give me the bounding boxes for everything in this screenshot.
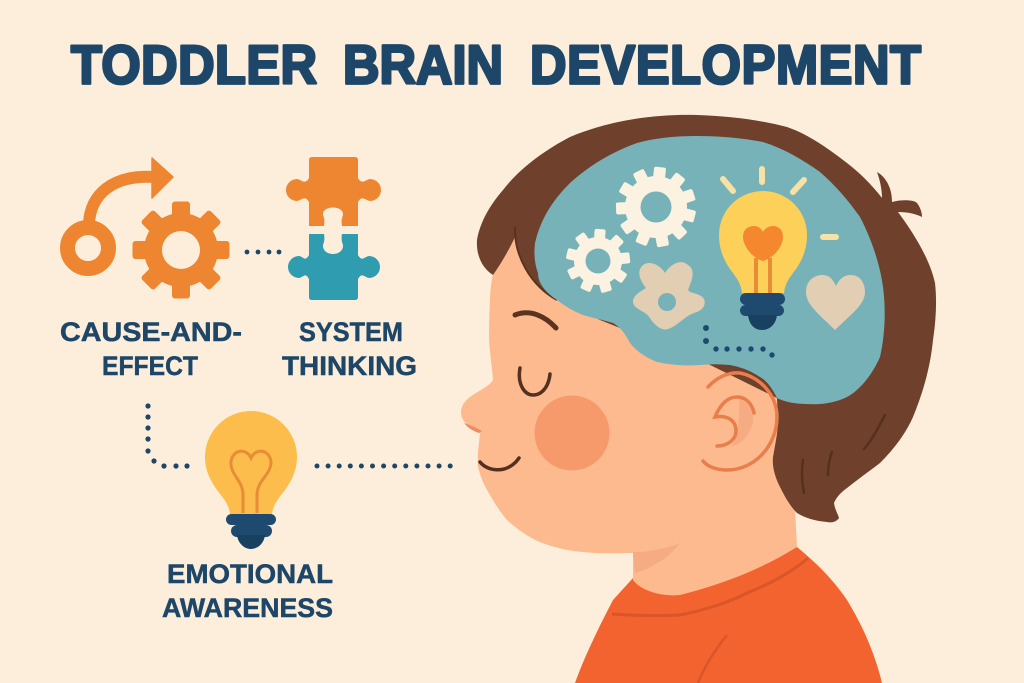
face and neck skin — [461, 237, 797, 595]
dotted path in brain — [703, 325, 775, 358]
dotted connector to bulb — [145, 403, 190, 469]
ear — [703, 373, 777, 470]
icon: curved arrow with ring — [68, 158, 173, 268]
icon: beige heart — [806, 275, 865, 330]
bulb rays — [723, 169, 836, 237]
icon: orange puzzle piece — [286, 157, 381, 226]
icon: large white gear — [616, 167, 696, 247]
panel: emotional awareness — [162, 411, 333, 623]
label: cause and effect: EFFECT — [102, 351, 198, 381]
smile — [480, 458, 519, 470]
icon: brain light bulb — [719, 169, 836, 330]
label: emotional awareness: AWARENESS — [162, 593, 333, 623]
panel: toddler head — [461, 115, 936, 683]
hair strand lines — [802, 415, 885, 493]
cheek — [534, 396, 610, 470]
title: DEVELOPMENT — [530, 35, 921, 96]
label: cause and effect — [60, 317, 242, 381]
title — [71, 35, 921, 96]
label: system thinking: THINKING — [282, 351, 417, 381]
icon: beige flower — [633, 262, 705, 329]
neck shadow — [633, 543, 680, 573]
icon: light bulb — [205, 411, 297, 549]
hair fringe line — [515, 227, 557, 300]
nose shadow — [464, 423, 482, 433]
eyebrow — [515, 313, 556, 328]
panel: system thinking — [282, 157, 417, 381]
icon: teal puzzle piece — [288, 234, 380, 300]
label: cause and effect: CAUSE-AND- — [60, 317, 242, 347]
connector dots between gear and puzzle — [245, 250, 281, 254]
dotted connector to face — [317, 464, 452, 468]
shirt sleeve line — [698, 635, 727, 683]
icon: small white gear — [566, 229, 630, 293]
panel: cause and effect — [60, 158, 242, 381]
label: system thinking — [282, 317, 417, 381]
hair — [477, 115, 936, 522]
title: TODDLER — [71, 35, 317, 96]
brain area — [534, 136, 885, 404]
label: emotional awareness — [162, 559, 333, 623]
label: emotional awareness: EMOTIONAL — [167, 559, 333, 589]
icon: orange gear — [132, 202, 230, 298]
closed eye — [519, 368, 550, 395]
shirt collar line — [612, 558, 808, 616]
title: BRAIN — [343, 35, 503, 96]
label: system thinking: SYSTEM — [299, 317, 403, 347]
shirt — [575, 547, 882, 683]
